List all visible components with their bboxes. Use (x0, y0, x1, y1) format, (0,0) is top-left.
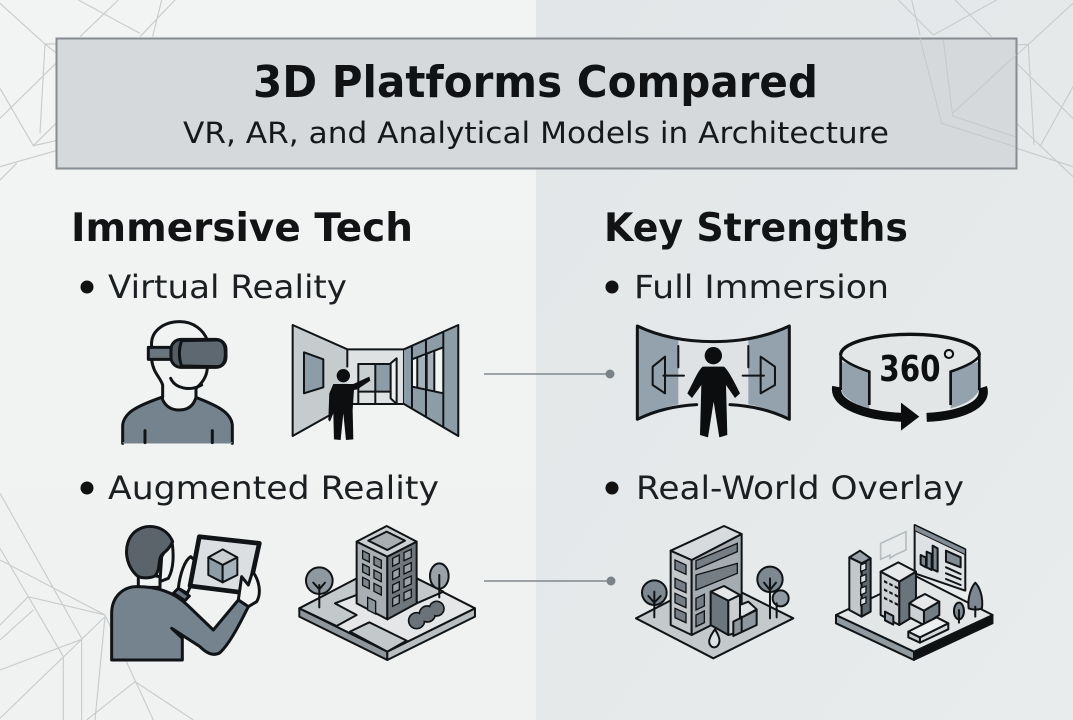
title: 3D Platforms Compared (253, 57, 818, 108)
icon: person wearing VR headset (123, 322, 232, 443)
icon: building with trees on overlay plane (636, 526, 793, 658)
icon: curved immersive screen with figure (637, 326, 789, 437)
bullet: Real-World Overlay: Real-World Overlay (636, 469, 964, 507)
arrow: AR connector (484, 576, 616, 586)
degree symbol: ° (941, 342, 957, 381)
360 label: 360 (879, 349, 941, 390)
icon: person holding tablet with AR cube (112, 526, 259, 660)
title panel (56, 38, 1016, 168)
arrow: VR connector (484, 370, 614, 378)
icon: isometric building on site plan (299, 526, 475, 660)
bullet: Augmented Reality: Augmented Reality (108, 469, 439, 507)
icon: analytical model with data dashboard (836, 525, 993, 660)
bullet: Full Immersion: Full Immersion (634, 268, 889, 306)
bullet: Virtual Reality: Virtual Reality (108, 268, 347, 306)
heading: Key Strengths: Key Strengths (604, 206, 908, 251)
subtitle: VR, AR, and Analytical Models in Architecture (183, 116, 889, 150)
heading: Immersive Tech: Immersive Tech (71, 206, 413, 251)
icon: virtual room with pointing figure (293, 325, 458, 440)
icon: 360 degree rotation cylinder (836, 334, 983, 431)
